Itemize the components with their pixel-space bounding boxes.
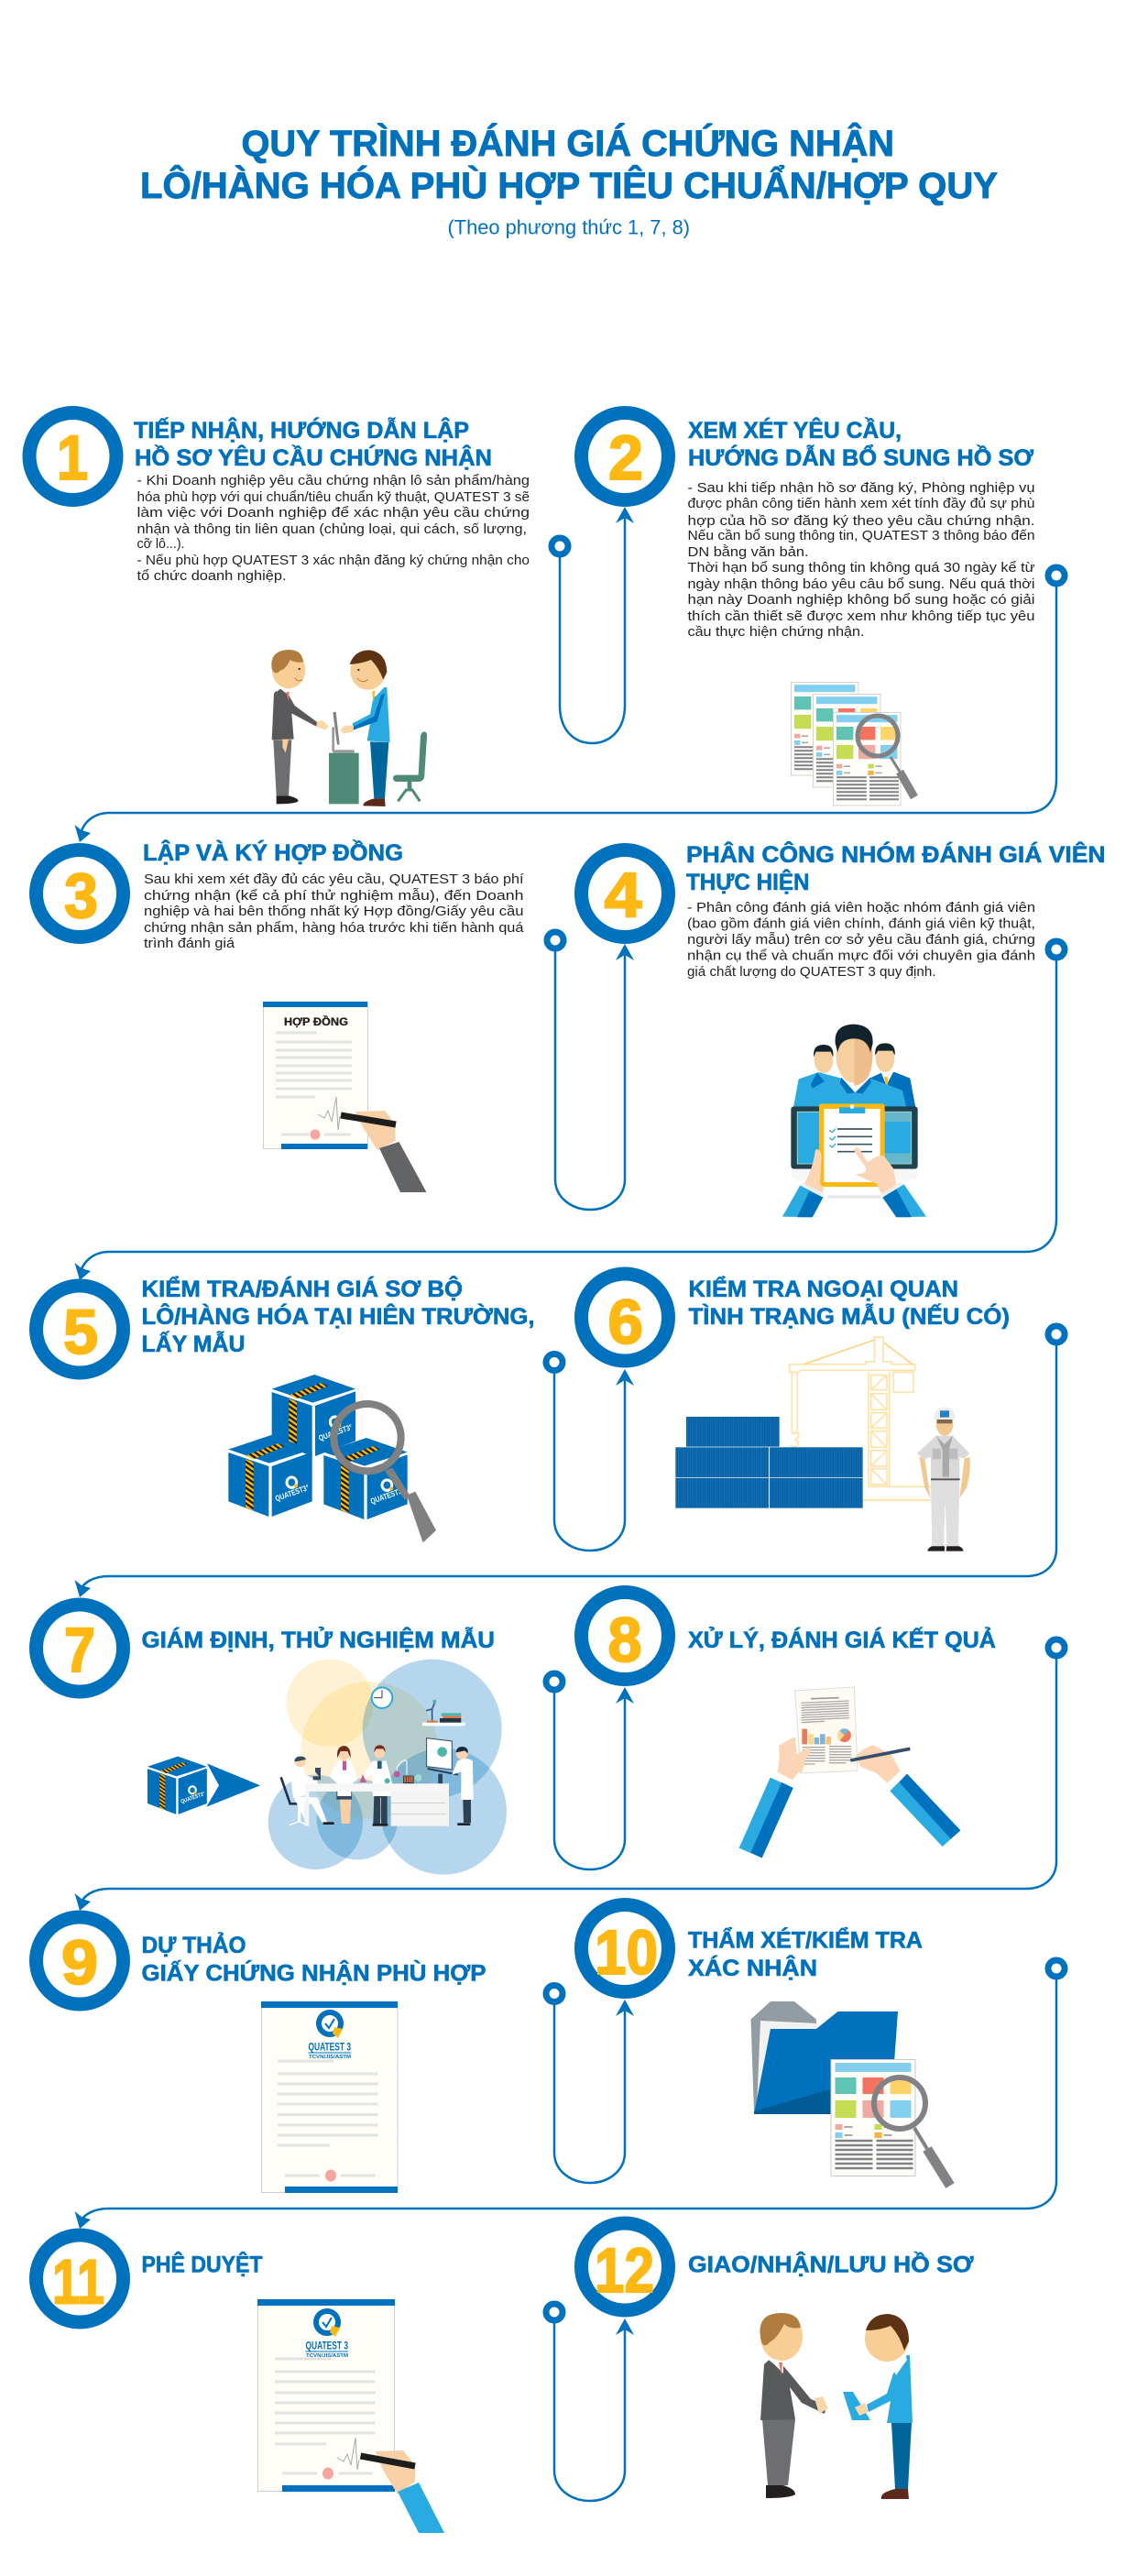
heading 1: TIẾP NHẬN, HƯỚNG DẪN LẬP <box>134 416 469 444</box>
body text 2 <box>687 480 1035 640</box>
heading 4: THỰC HIỆN <box>686 868 810 895</box>
panel: step 5 <box>37 1275 535 1542</box>
body text 2: Thời hạn bổ sung thông tin không quá 30 ngày kể từ <box>687 560 1035 575</box>
connector: step 2 to step 3 <box>75 567 1065 842</box>
body text 4: nhận cụ thể và chuẩn mực đối với chuyên gia đánh <box>687 948 1035 964</box>
number badge 10: 10 <box>595 1917 658 1988</box>
heading 6 <box>689 1276 1010 1330</box>
body text 3: chứng nhận (kể cả phí thử nghiệm mẫu), đến Doanh <box>144 888 524 904</box>
heading 10: XÁC NHẬN <box>688 1954 817 1981</box>
body text 3: Sau khi xem xét đầy đủ các yêu cầu, QUATEST 3 báo phí <box>144 871 524 887</box>
number badge 5 <box>37 1286 123 1373</box>
illustration: signed certificate: TCVN/JIS/ASTM <box>306 2353 348 2359</box>
body text 3: nghiệp và hai bên thống nhất ký Hợp đồng/Giấy yêu cầu <box>144 904 524 919</box>
panel: step 11 <box>37 2235 444 2533</box>
illustration: handing over documents <box>760 2313 913 2499</box>
body text 3: trình đánh giá <box>144 936 235 951</box>
heading 9: DỰ THẢO <box>141 1931 246 1958</box>
heading 10: THẨM XÉT/KIỂM TRA <box>688 1926 923 1954</box>
panel: step 1 <box>29 412 530 806</box>
panel: step 4 <box>581 840 1105 1217</box>
illustration: signed certificate <box>257 2299 444 2533</box>
body text 2: hợp của hồ sơ đăng ký theo yêu cầu chứng nhận. <box>687 513 1035 529</box>
heading 11: PHÊ DUYỆT <box>141 2251 262 2278</box>
illustration: two men at desk <box>271 650 427 806</box>
body text 2: cầu thực hiện chứng nhận. <box>687 624 865 640</box>
number badge 6 <box>581 1274 669 1361</box>
heading 5: LẤY MẪU <box>141 1330 246 1357</box>
number badge 8 <box>581 1593 669 1679</box>
connector: step 4 to step 5 <box>75 941 1065 1280</box>
connector: step 1 to step 2 <box>552 507 634 743</box>
number badge 4: 4 <box>605 860 641 930</box>
illustration: laboratory with sample box <box>148 1660 507 1875</box>
title: LÔ/HÀNG HÓA PHÙ HỢP TIÊU CHUẨN/HỢP QUY <box>140 163 998 206</box>
number badge 10 <box>581 1904 669 1992</box>
illustration: boxes and magnifier: QUATEST3° <box>369 1485 406 1506</box>
illustration: signed contract <box>263 1002 427 1192</box>
body text 1: làm việc với Doanh nghiệp để xác nhận yêu cầu chứng <box>137 505 530 521</box>
body text 2: thích cần thiết sẽ được xem như không tiếp tục yêu <box>687 608 1035 624</box>
body text 2: hạn này Doanh nghiệp không bổ sung hoặc có giải <box>687 592 1035 608</box>
body text 1: - Nếu phù hợp QUATEST 3 xác nhận đăng ký chứng nhận cho <box>137 553 530 568</box>
number badge 7: 7 <box>64 1615 95 1685</box>
number badge 9 <box>37 1917 123 2004</box>
heading 2 <box>688 416 1034 471</box>
heading 10 <box>688 1926 923 1981</box>
heading 12: GIAO/NHẬN/LƯU HỒ SƠ <box>688 2251 974 2278</box>
illustration: draft certificate: QUATEST 3 <box>308 2040 351 2053</box>
body text 4: (bao gồm đánh giá viên chính, đánh giá viên kỹ thuật, <box>687 916 1035 931</box>
body text 4: giá chất lượng do QUATEST 3 quy định. <box>687 964 936 980</box>
illustration: hands reviewing report <box>739 1687 960 1858</box>
number badge 12 <box>581 2223 669 2310</box>
number badge 6: 6 <box>608 1287 643 1357</box>
heading 4 <box>686 840 1105 895</box>
heading 6: TÌNH TRẠNG MẪU (NẾU CÓ) <box>689 1302 1010 1330</box>
heading 1 <box>134 416 492 471</box>
number badge 2 <box>581 412 669 500</box>
panel: step 7 <box>37 1605 507 1875</box>
number badge 8: 8 <box>608 1605 641 1675</box>
body text 2: ngày nhận thông báo yêu câu bổ sung. Nếu quá thời <box>687 576 1035 592</box>
number badge 3: 3 <box>64 860 98 931</box>
title: QUY TRÌNH ĐÁNH GIÁ CHỨNG NHẬN <box>242 122 894 164</box>
title <box>140 122 998 206</box>
illustration: signed contract: HỢP ĐỒNG <box>284 1014 348 1028</box>
heading 4: PHÂN CÔNG NHÓM ĐÁNH GIÁ VIÊN <box>686 840 1105 868</box>
connector: step 10 to step 11 <box>75 1960 1065 2229</box>
body text 1 <box>137 473 530 584</box>
panel: step 2 <box>581 412 1035 806</box>
body text 1: hóa phù hợp với qui chuẩn/tiêu chuẩn kỹ thuật, QUATEST 3 sẽ <box>137 489 530 505</box>
illustration: draft certificate <box>261 2001 398 2193</box>
heading 8: XỬ LÝ, ĐÁNH GIÁ KẾT QUẢ <box>688 1626 996 1653</box>
heading 2: XEM XÉT YÊU CẦU, <box>688 416 902 444</box>
subtitle: (Theo phương thức 1, 7, 8) <box>447 216 690 238</box>
number badge 11 <box>37 2235 123 2322</box>
panel: step 10 <box>581 1904 950 2186</box>
heading 2: HƯỚNG DẪN BỔ SUNG HỒ SƠ <box>688 444 1034 471</box>
heading 9: GIẤY CHỨNG NHẬN PHÙ HỢP <box>141 1959 486 1987</box>
heading 6: KIỂM TRA NGOẠI QUAN <box>689 1276 958 1302</box>
heading 7: GIÁM ĐỊNH, THỬ NGHIỆM MẪU <box>141 1626 495 1653</box>
illustration: folder, report and magnifier <box>751 2001 950 2186</box>
illustration: boxes and magnifier: QUATEST3° <box>317 1422 354 1442</box>
body text 1: cỡ lô...). <box>137 536 185 552</box>
illustration: boxes and magnifier: QUATEST3° <box>274 1483 311 1503</box>
illustration: crane, containers and worker <box>675 1337 970 1551</box>
heading 9 <box>141 1931 486 1987</box>
panel: step 12 <box>581 2223 974 2499</box>
body text 2: - Sau khi tiếp nhận hồ sơ đăng ký, Phòng nghiệp vụ <box>687 480 1035 496</box>
heading 5: LÔ/HÀNG HÓA TẠI HIÊN TRƯỜNG, <box>141 1302 535 1330</box>
body text 2: DN bằng văn bản. <box>687 544 808 560</box>
connector: step 8 to step 9 <box>75 1639 1065 1911</box>
connector: step 5 to step 6 <box>546 1354 634 1551</box>
heading 5: KIỂM TRA/ĐÁNH GIÁ SƠ BỘ <box>141 1275 463 1302</box>
illustration: laboratory with sample box: QUATEST3° <box>180 1791 206 1805</box>
body text 3: chứng nhận sản phẩm, hàng hóa trước khi tiến hành quá <box>144 920 524 936</box>
number badge 9: 9 <box>61 1927 98 1998</box>
number badge 3 <box>37 850 123 937</box>
number badge 2: 2 <box>608 422 643 493</box>
body text 4: người lấy mẫu) trên cơ sở yêu cầu đánh giá, chứng <box>687 932 1035 948</box>
body text 1: tổ chức doanh nghiệp. <box>137 568 286 584</box>
number badge 7 <box>37 1605 123 1692</box>
illustration: assessor team with clipboard <box>782 1025 926 1217</box>
body text 4: - Phân công đánh giá viên hoặc nhóm đánh giá viên <box>687 900 1035 915</box>
body text 2: Nếu cần bổ sung thông tin, QUATEST 3 thông báo đến <box>687 528 1035 543</box>
panel: step 6 <box>581 1274 1010 1551</box>
connector: step 7 to step 8 <box>546 1673 634 1869</box>
connector: step 11 to step 12 <box>546 2304 634 2501</box>
illustration: reports and magnifier <box>791 682 914 806</box>
body text 2: được phân công tiến hành xem xét tính đầy đủ sự phù <box>687 496 1035 511</box>
body text 1: nhận và thông tin liên quan (chủng loại, qui cách, số lượng, <box>137 521 527 537</box>
body text 4 <box>687 900 1035 980</box>
number badge 1: 1 <box>57 422 88 493</box>
illustration: draft certificate: TCVN/JIS/ASTM <box>309 2055 351 2060</box>
illustration: signed certificate: QUATEST 3 <box>306 2339 348 2351</box>
number badge 1 <box>29 412 116 500</box>
connector: step 3 to step 4 <box>547 932 634 1210</box>
number badge 5: 5 <box>63 1297 98 1367</box>
connector: step 9 to step 10 <box>546 1985 634 2183</box>
heading 1: HỒ SƠ YÊU CẦU CHỨNG NHẬN <box>135 444 492 471</box>
heading 3: LẬP VÀ KÝ HỢP ĐỒNG <box>143 839 403 866</box>
panel: step 8 <box>581 1593 996 1858</box>
connector: step 6 to step 7 <box>75 1326 1065 1597</box>
heading 5 <box>141 1275 535 1357</box>
number badge 11: 11 <box>52 2247 104 2317</box>
number badge 12: 12 <box>595 2235 654 2306</box>
body text 1: - Khi Doanh nghiệp yêu cầu chứng nhận lô sản phẩm/hàng <box>137 473 530 488</box>
illustration: boxes and magnifier <box>228 1375 436 1542</box>
number badge 4 <box>581 850 669 937</box>
panel: step 3 <box>37 839 524 1192</box>
body text 3 <box>144 871 524 951</box>
panel: step 9 <box>37 1917 486 2193</box>
